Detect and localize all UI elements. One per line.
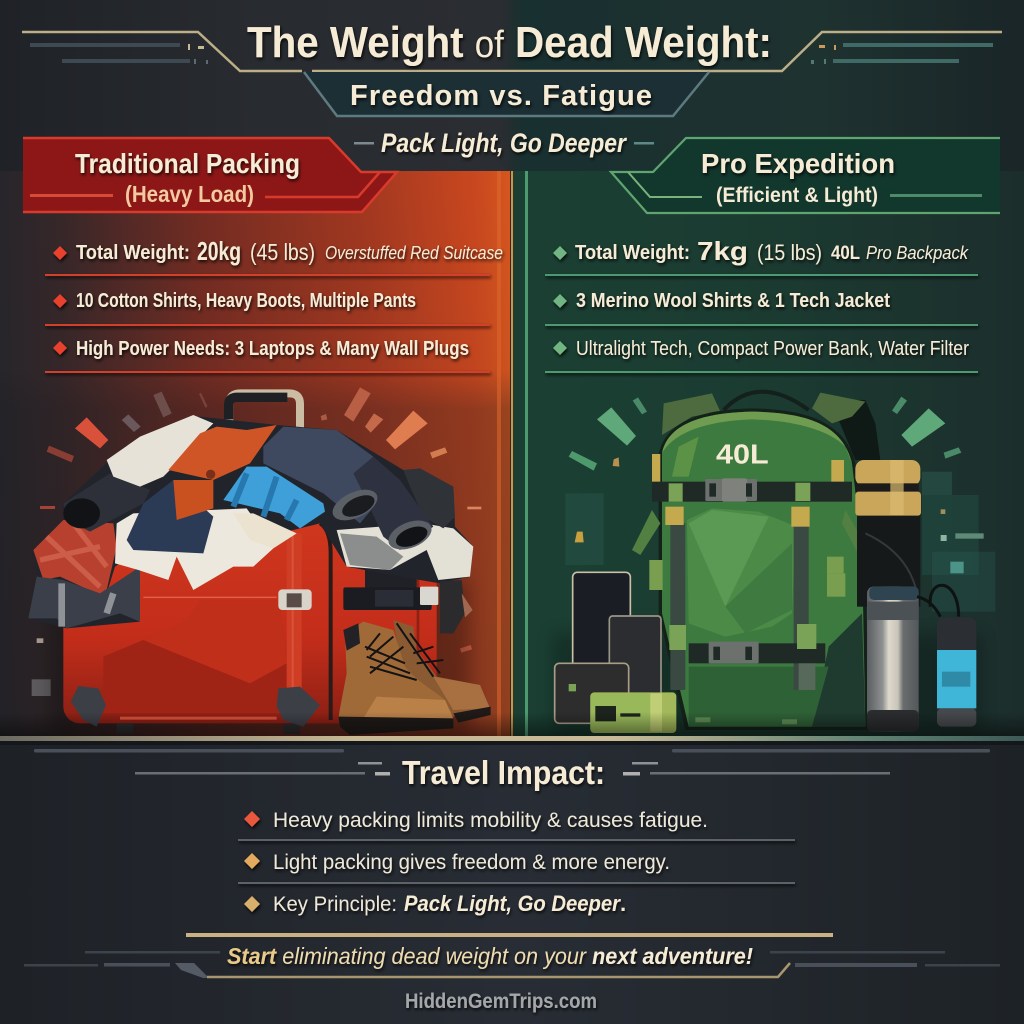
- filter bottle and cable: [917, 585, 976, 727]
- list: traditional packing: [45, 236, 503, 373]
- call to action banner: Start eliminating dead weight on your next adventure!: [227, 943, 753, 969]
- list: pro expedition: 3 Merino Wool Shirts & 1 Tech Jacket: [576, 290, 890, 312]
- title: The Weight of Dead Weight:: [247, 18, 772, 67]
- panel heading: traditional packing: Traditional Packing: [75, 148, 300, 179]
- panel heading: traditional packing: [23, 138, 397, 212]
- rolled tube with gold caps: [855, 460, 921, 607]
- impact list: Heavy packing limits mobility & causes fatigue.: [273, 809, 708, 832]
- insulated steel bottle: [867, 587, 919, 732]
- header ornament: left: [22, 32, 302, 71]
- list: traditional packing: 10 Cotton Shirts, Heavy Boots, Multiple Pants: [76, 290, 416, 312]
- website footer: HiddenGemTrips.com: [405, 990, 597, 1013]
- list: traditional packing: Total Weight:: [76, 242, 190, 264]
- suitcase strap: [343, 570, 438, 610]
- floor shadow: [0, 712, 1024, 736]
- tagline: Pack Light, Go Deeper: [381, 128, 627, 158]
- list: traditional packing: High Power Needs: 3 Laptops & Many Wall Plugs: [76, 338, 469, 360]
- floor line: [0, 736, 1024, 745]
- hiking boots: [338, 620, 491, 735]
- call to action banner: [24, 933, 1000, 978]
- backpack straps and handle: [662, 392, 880, 460]
- phone, tablet and power bank: [555, 572, 676, 733]
- panel heading: pro expedition: Pro Expedition: [701, 148, 895, 179]
- panel: pro expedition background: [511, 171, 1024, 738]
- impact list: Pack Light, Go Deeper: [404, 891, 621, 916]
- burst rays: [32, 387, 481, 696]
- list: pro expedition: Total Weight:: [575, 242, 690, 264]
- list: traditional packing: Overstuffed Red Suitcase: [325, 243, 503, 263]
- illustration: overstuffed red suitcase: [28, 387, 491, 735]
- illustration: 40L pro backpack and light gear: [552, 392, 995, 733]
- list: pro expedition: 40L: [831, 243, 860, 264]
- list: pro expedition: [545, 236, 978, 373]
- panel: traditional packing background: [0, 171, 510, 738]
- subtitle banner: Freedom vs. Fatigue: [350, 80, 652, 112]
- panel heading: pro expedition: (Efficient & Light): [716, 184, 878, 207]
- impact list: .: [620, 891, 626, 916]
- capacity label: 40L: [716, 438, 769, 469]
- suitcase handle: [229, 393, 300, 430]
- panel heading: traditional packing: (Heavy Load): [125, 181, 254, 207]
- impact list: Key Principle:: [273, 893, 397, 916]
- subtitle banner: [304, 72, 709, 117]
- header ornament: right: [312, 32, 1002, 71]
- impact list: Light packing gives freedom & more energy.: [273, 851, 670, 874]
- list: pro expedition: 7kg: [697, 236, 748, 266]
- backpack body: [632, 408, 869, 730]
- impact list: [238, 809, 795, 916]
- list: traditional packing: (45 lbs): [250, 239, 315, 265]
- list: pro expedition: Ultralight Tech, Compact Power Bank, Water Filter: [576, 338, 969, 360]
- pile of clothes: [28, 415, 473, 633]
- list: pro expedition: (15 lbs): [757, 240, 822, 265]
- backpack shadow: [552, 633, 982, 733]
- section heading: travel impact: [34, 749, 990, 791]
- suitcase shadow: [50, 580, 470, 733]
- list: traditional packing: 20kg: [197, 236, 241, 266]
- section heading: travel impact: Travel Impact:: [402, 754, 605, 791]
- burst rays and background blocks: [565, 397, 995, 612]
- suitcase shell: [63, 517, 437, 734]
- list: pro expedition: Pro Backpack: [866, 243, 969, 263]
- panel heading: pro expedition: [611, 138, 1000, 213]
